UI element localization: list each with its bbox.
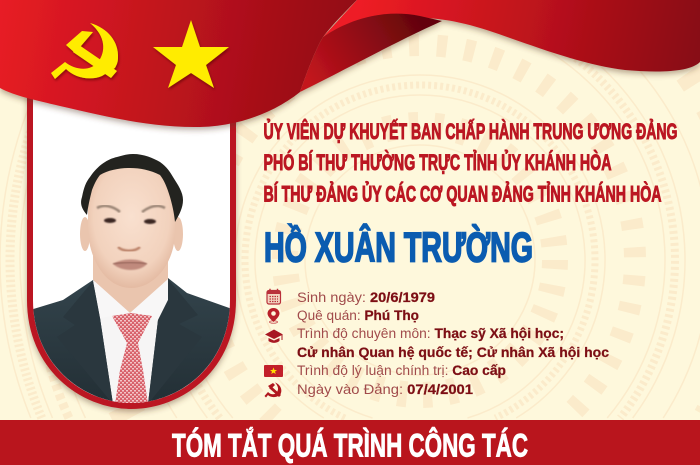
party join date: Ngày vào Đảng: 07/4/2001 [297, 382, 474, 397]
icon: yellow star [153, 20, 229, 88]
banner heading: TÓM TẮT QUÁ TRÌNH CÔNG TÁC [172, 428, 528, 464]
icon: small hammer and sickle [264, 382, 281, 398]
shirt [93, 281, 168, 404]
eyes [104, 218, 156, 224]
hometown: Quê quán: Phú Thọ [297, 308, 419, 323]
icon: flag [264, 365, 283, 377]
icon: graduation cap [265, 330, 283, 343]
face [88, 165, 175, 288]
suit [30, 278, 232, 410]
qualification line 1: Trình độ chuyên môn: Thạc sỹ Xã hội học; [297, 326, 564, 341]
lapels [70, 280, 194, 402]
red flag ribbon [0, 0, 700, 127]
mouth [113, 260, 147, 270]
hair [81, 154, 183, 222]
titles [264, 119, 678, 206]
eyebrows [97, 206, 165, 212]
main ribbon right [323, 0, 700, 71]
icon: hammer and sickle [51, 23, 118, 79]
ears [80, 217, 90, 251]
main ribbon left [0, 0, 357, 127]
name: HỒ XUÂN TRƯỜNG [264, 222, 533, 270]
necktie [112, 313, 152, 404]
info list [297, 290, 610, 397]
birth date: Sinh ngày: 20/6/1979 [297, 290, 435, 305]
portrait photo [30, 154, 232, 410]
collar [93, 279, 168, 320]
neck [93, 256, 168, 313]
icon: location pin [268, 308, 280, 323]
bottom banner [0, 420, 700, 465]
qualification line 2: Cử nhân Quan hệ quốc tế; Cử nhân Xã hội học [297, 345, 610, 360]
nose [118, 247, 140, 251]
ribbon fold [300, 14, 442, 92]
icon: calendar [267, 289, 280, 304]
portrait frame [30, 90, 233, 410]
political theory: Trình độ lý luận chính trị: Cao cấp [297, 363, 506, 378]
